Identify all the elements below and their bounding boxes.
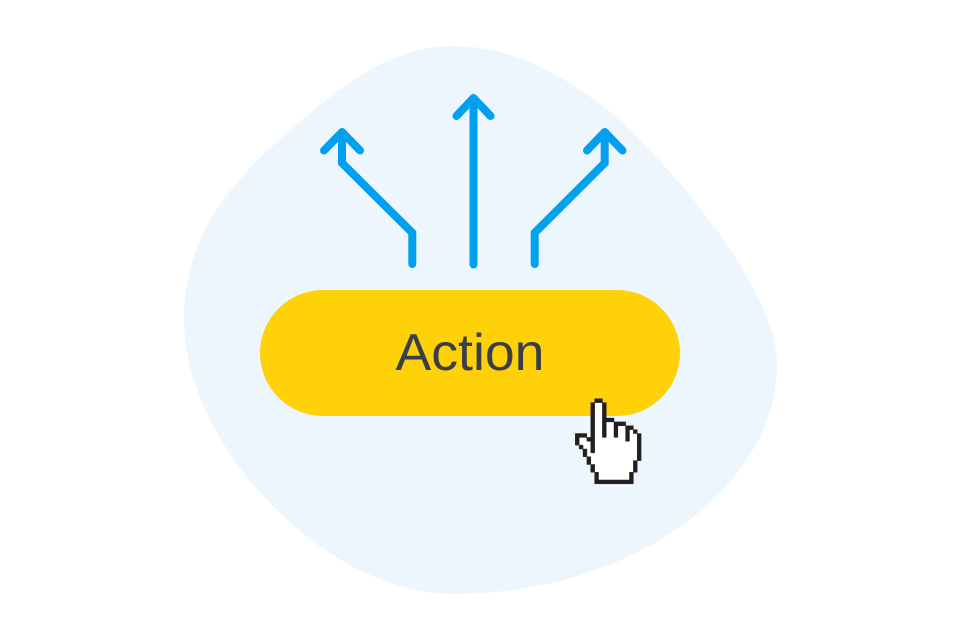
arrow: centre: [456, 98, 490, 264]
hand outline: [575, 399, 641, 484]
button label: Action: [396, 324, 544, 382]
action button: [260, 290, 680, 416]
arrow: left: [324, 132, 412, 264]
icon: pixel hand cursor: [575, 399, 641, 484]
hand fill: [575, 403, 641, 484]
background blob: [184, 46, 777, 594]
arrow: right: [535, 132, 622, 264]
button pill: [260, 290, 680, 416]
